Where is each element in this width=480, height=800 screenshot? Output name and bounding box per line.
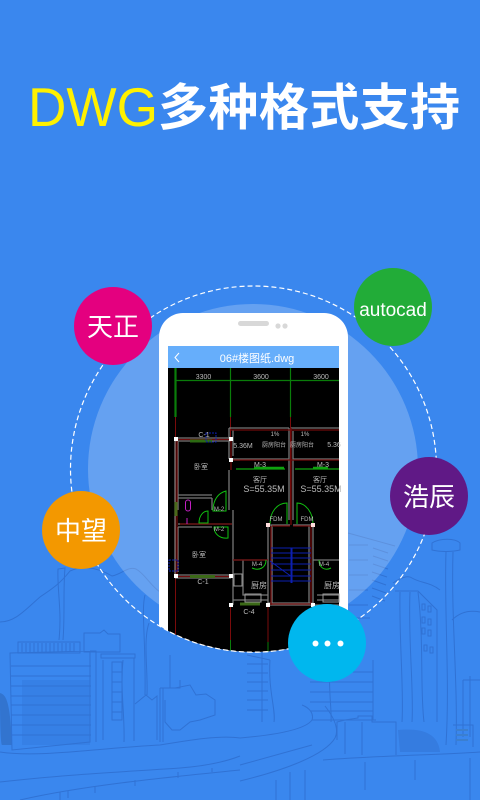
grid lines (175, 368, 339, 680)
magenta fixture (186, 500, 190, 524)
app header (168, 346, 339, 368)
badge: 天正 (74, 287, 152, 365)
phone body (159, 313, 348, 652)
labels: M-4 (252, 562, 263, 568)
labels: 厨房阳台 (262, 441, 286, 449)
labels: S=55.35M (243, 484, 285, 494)
white nodes (174, 437, 315, 607)
labels: S=55.35M (300, 484, 342, 494)
labels: C-1 (197, 579, 209, 586)
dashed orbit (70, 286, 436, 652)
badge: 浩辰: 浩辰 (403, 482, 455, 512)
labels: 5.36 (327, 442, 341, 449)
phone speaker (238, 321, 288, 329)
labels (192, 432, 342, 616)
dimensions: 3300 (196, 374, 211, 381)
badge: 中望 (42, 491, 120, 569)
dimensions: 3600 (313, 374, 329, 381)
walls (175, 428, 339, 605)
red wall core (177, 428, 339, 605)
badge: autocad: autocad (359, 300, 427, 321)
labels: M-3 (317, 462, 329, 469)
badge: 中望: 中望 (55, 516, 107, 546)
labels: 1% (301, 432, 310, 438)
title (28, 76, 460, 138)
title: DWG (28, 76, 158, 138)
dimensions: 3600 (253, 374, 269, 381)
labels: 客厅 (253, 475, 267, 484)
light circle (88, 304, 418, 634)
labels: 5.36M (233, 443, 253, 450)
labels: C-1 (198, 432, 210, 439)
badge: more (288, 604, 366, 682)
city skyline sketch (0, 533, 480, 800)
labels: M-4 (319, 562, 330, 568)
labels: M-3 (254, 462, 266, 469)
badge: 浩辰 (390, 457, 468, 535)
green windows and doors (176, 441, 339, 604)
labels: FDM (270, 517, 282, 523)
labels: 1% (271, 432, 280, 438)
stairs (169, 433, 311, 583)
labels: 厨房阳台 (290, 441, 314, 449)
title: 多种格式支持 (158, 80, 460, 136)
labels: FDM (300, 517, 314, 523)
CAD drawing (168, 368, 342, 680)
labels: 厨房 (251, 580, 267, 590)
phone (159, 313, 348, 652)
labels: 卧室 (194, 462, 208, 471)
badge: 天正: 天正 (87, 312, 139, 342)
kitchen fixtures (234, 574, 339, 602)
orbit over phone (170, 632, 337, 652)
labels: 客厅 (313, 475, 327, 484)
badge: autocad (354, 268, 432, 346)
labels: C-4 (243, 609, 255, 616)
app header: 06#楼图纸.dwg (220, 351, 294, 365)
dimensions (196, 374, 328, 379)
labels: 卧室 (192, 550, 206, 559)
labels: 厨房 (324, 580, 340, 590)
labels: M-2 (214, 507, 225, 513)
labels: M-2 (214, 527, 225, 533)
